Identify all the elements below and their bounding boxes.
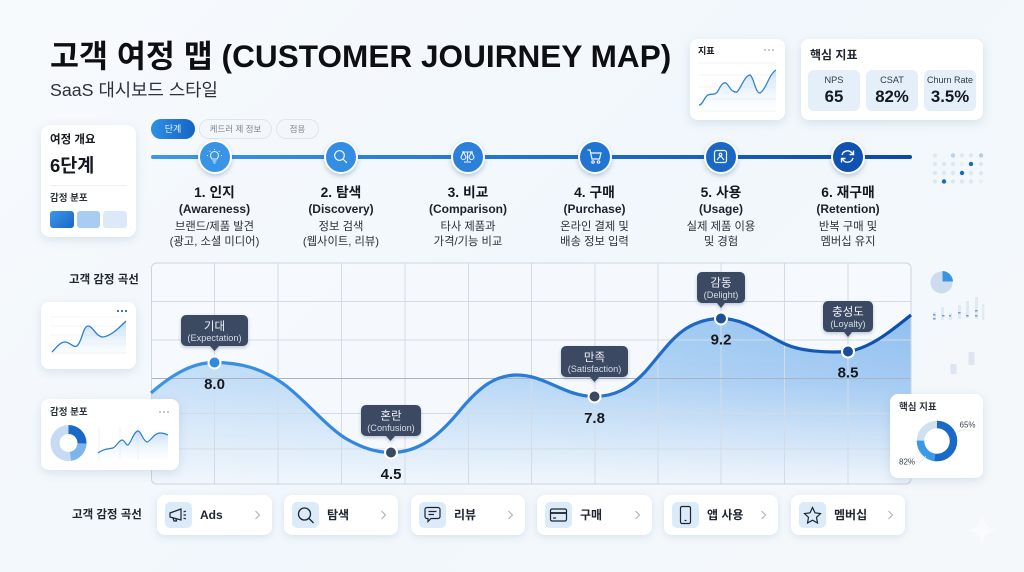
chart card heading: 지표	[698, 46, 715, 56]
label: Ads	[200, 508, 223, 522]
point: expectation 8.0	[181, 315, 248, 393]
chevron	[761, 510, 766, 520]
donut chart	[899, 420, 976, 466]
step 6 text: 6. 재구매	[821, 185, 875, 200]
donut and line chart	[50, 425, 168, 461]
point: confusion 4.5: (Confusion)	[367, 423, 415, 433]
label: 리뷰	[454, 508, 476, 522]
tab: details: 케드러 제 정보	[210, 124, 261, 134]
step 1 text	[170, 185, 259, 248]
chevron	[255, 510, 260, 520]
step 3 text: (Comparison)	[429, 202, 507, 216]
point: loyalty 8.5	[823, 301, 873, 382]
timeline line	[151, 154, 912, 158]
step 1 text: 브랜드/제품 발견	[175, 221, 254, 233]
touchpoint: Ads	[157, 495, 272, 535]
icon: credit card	[545, 502, 572, 528]
step 5 text: 실제 제품 이용	[687, 221, 755, 233]
key metrics heading: 핵심 지표	[810, 48, 858, 62]
step 6 text: 반복 구매 및	[819, 221, 877, 233]
touchpoint: app usage	[664, 495, 778, 535]
point: loyalty 8.5: (Loyalty)	[830, 319, 866, 329]
chevron	[888, 510, 894, 520]
step 2 text	[303, 185, 379, 248]
metric: Churn Rate: Churn Rate	[927, 75, 973, 85]
point: confusion 4.5	[361, 405, 421, 483]
step 5 text: 및 경험	[704, 236, 738, 248]
icon: step 2 search	[324, 140, 358, 174]
point: expectation 8.0: 기대	[204, 320, 225, 333]
subtitle: SaaS 대시보드 스타일	[50, 80, 218, 100]
step 5 text: (Usage)	[699, 202, 743, 216]
icon: step 5 app	[704, 140, 738, 174]
menu dots	[159, 411, 169, 413]
menu dots	[764, 49, 774, 51]
panel: journey overview	[41, 125, 136, 237]
label: 구매	[580, 508, 602, 522]
tab: stages active	[151, 119, 195, 139]
point: loyalty 8.5: 8.5	[838, 364, 858, 382]
step 6 text: (Retention)	[816, 202, 880, 216]
stage count: 6단계	[50, 155, 94, 176]
step 4 text	[560, 185, 629, 248]
tab: stages active: 단계	[165, 124, 181, 134]
metric: Churn Rate	[924, 70, 976, 111]
panel: key metrics	[801, 39, 983, 120]
metric: NPS: NPS	[825, 75, 843, 85]
icon: smartphone	[672, 502, 699, 528]
icon: megaphone	[165, 502, 192, 528]
decorative dot grid	[933, 153, 984, 184]
touchpoint: membership	[791, 495, 905, 535]
chart: customer emotion curve	[150, 262, 912, 484]
donut chart: 82%	[899, 458, 915, 466]
step 3 text: 가격/기능 비교	[434, 236, 502, 248]
panel: key metrics donut	[890, 394, 983, 478]
line chart: mini trend	[50, 310, 128, 354]
chevron	[508, 510, 514, 520]
point: satisfaction 7.8: 7.8	[584, 410, 605, 427]
point: confusion 4.5: 혼란	[380, 410, 402, 422]
panel: emotion distribution	[41, 399, 179, 470]
step 1 text: (Awareness)	[179, 202, 250, 216]
step 3 text: 타사 제품과	[440, 221, 496, 233]
panel: mini trend card	[41, 302, 136, 369]
label: 멤버십	[834, 508, 867, 522]
point: satisfaction 7.8: (Satisfaction)	[568, 364, 621, 374]
metric: NPS: 65	[825, 87, 843, 106]
emotion swatches	[50, 211, 127, 228]
decorative mini pie	[930, 271, 984, 374]
point: satisfaction 7.8: 만족	[584, 351, 605, 364]
icon: magnifier	[292, 502, 319, 528]
step 3 text	[429, 185, 507, 248]
point: satisfaction 7.8	[561, 346, 628, 427]
step 4 text: 4. 구매	[574, 185, 615, 200]
step 2 text: 정보 검색	[319, 221, 363, 233]
donut chart: 65%	[960, 420, 976, 430]
point: delight 9.2: 9.2	[711, 332, 731, 348]
icon: star	[799, 502, 826, 528]
overview heading: 여정 개요	[50, 134, 96, 146]
point: delight 9.2: 감동	[710, 276, 732, 290]
emotion distribution label: 감정 분포	[50, 193, 88, 204]
step 6 text	[816, 185, 880, 248]
metric: NPS	[808, 70, 860, 111]
step 2 text: (웹사이트, 리뷰)	[303, 236, 379, 248]
step 3 text: 3. 비교	[448, 185, 488, 200]
step 5 text: 5. 사용	[701, 185, 741, 200]
step 2 text: 2. 탐색	[321, 185, 361, 200]
point: expectation 8.0: (Expectation)	[187, 333, 242, 343]
area under curve	[151, 315, 911, 484]
step 4 text: (Purchase)	[563, 202, 626, 216]
point: delight 9.2	[697, 272, 745, 348]
label: 탐색	[327, 508, 349, 522]
step 1 text: 1. 인지	[194, 185, 235, 200]
step 4 text: 온라인 결제 및	[560, 221, 629, 233]
tab: touchpoint	[276, 119, 319, 139]
decorative sparkle	[966, 514, 998, 546]
emotion curve line	[151, 315, 911, 452]
section label: emotion curve: 고객 감정 곡선	[69, 274, 139, 286]
touchpoint: review	[411, 495, 525, 535]
touchpoint: search	[284, 495, 398, 535]
step 4 text: 배송 정보 입력	[560, 236, 629, 248]
icon: step 6 refresh	[831, 140, 865, 174]
title: 고객 여정 맵 (CUSTOMER JOUIRNEY MAP)	[50, 38, 671, 74]
chevron	[381, 510, 386, 520]
metric: CSAT	[866, 70, 918, 111]
icon: step 4 cart	[578, 140, 612, 174]
tab: details	[199, 119, 272, 139]
point: confusion 4.5: 4.5	[381, 466, 401, 483]
point: delight 9.2: (Delight)	[704, 290, 738, 300]
label: 앱 사용	[707, 508, 743, 522]
step 6 text: 멤버십 유지	[820, 236, 876, 248]
step 2 text: (Discovery)	[308, 202, 374, 216]
panel: chart metrics card	[690, 39, 785, 120]
point: loyalty 8.5: 충성도	[832, 306, 864, 318]
icon: step 3 scales	[451, 140, 485, 174]
section label: touchpoints: 고객 감정 곡선	[72, 509, 142, 521]
icon: speech bubble	[419, 502, 446, 528]
metric: Churn Rate: 3.5%	[931, 87, 969, 106]
step 5 text	[687, 185, 755, 248]
touchpoint: purchase	[537, 495, 652, 535]
step 1 text: (광고, 소셜 미디어)	[170, 236, 259, 248]
chevron	[635, 510, 640, 520]
icon: step 1 lightbulb	[198, 140, 232, 174]
tab: touchpoint: 점용	[290, 124, 305, 134]
point: expectation 8.0: 8.0	[204, 376, 225, 393]
distribution heading: 감정 분포	[50, 407, 88, 418]
line chart: metrics trend	[699, 62, 776, 112]
metric: CSAT: 82%	[875, 87, 909, 106]
metric: CSAT: CSAT	[880, 75, 904, 85]
donut card heading: 핵심 지표	[899, 402, 937, 413]
